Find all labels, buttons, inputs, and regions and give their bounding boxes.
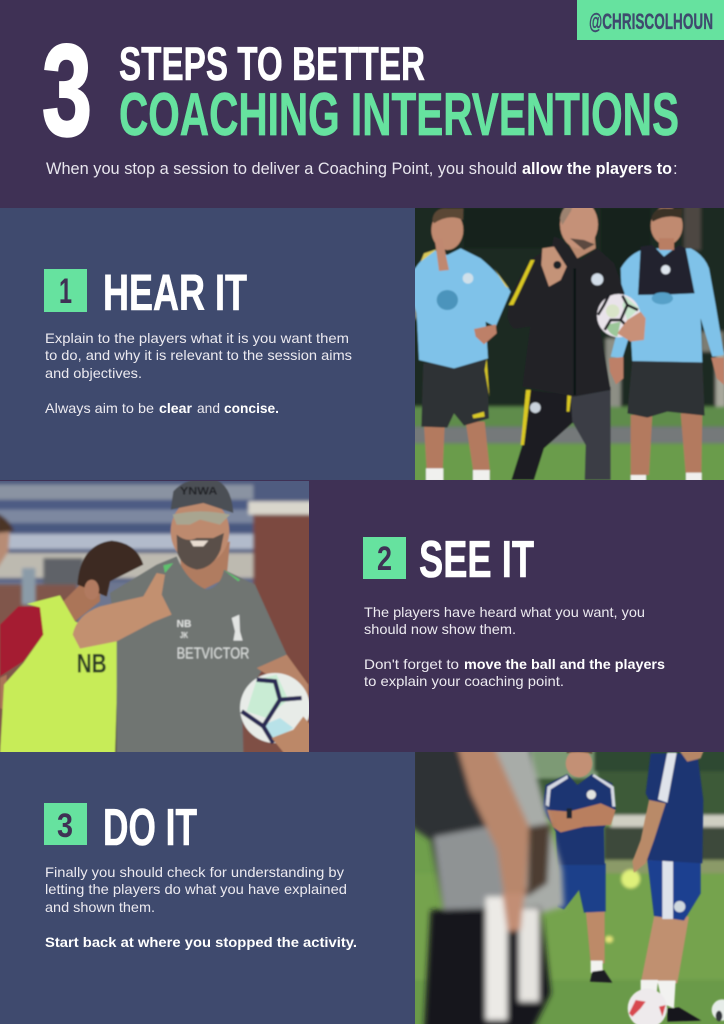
photo: coach in grey shirt with player in yellow bib <box>0 471 317 761</box>
body text step 1: clear <box>159 400 193 416</box>
photo: coach with folded arms on training pitch <box>407 743 724 1024</box>
panel: step 2 see it <box>309 480 724 752</box>
footballs <box>628 989 724 1024</box>
body text step 2 <box>364 604 665 689</box>
right assistant coach <box>632 750 704 1022</box>
body text step 3: letting the players do what you have explained <box>45 881 347 897</box>
coach in grey shirt: BETVICTOR <box>177 646 249 663</box>
body text step 1 <box>45 330 352 416</box>
body text step 2: to explain your coaching point. <box>364 673 564 689</box>
photo: coach with ball and two players in sky blue <box>407 198 724 487</box>
number badge 1: 1 <box>59 272 72 311</box>
left player <box>414 208 511 481</box>
number badge 3 <box>44 803 87 845</box>
body text step 1: Always aim to be <box>45 400 154 416</box>
ball <box>240 673 310 743</box>
centre coach <box>507 200 646 480</box>
number badge 3: 3 <box>57 807 73 845</box>
body text step 2: should now show them. <box>364 621 516 637</box>
heading: do it: DO IT <box>103 799 197 857</box>
body text step 1: to do, and why it is relevant to the session aims <box>45 347 352 363</box>
coach in grey shirt <box>73 478 308 755</box>
heading: see it: SEE IT <box>419 531 534 589</box>
handle tag <box>577 0 724 40</box>
body text step 1: Explain to the players what it is you want them <box>45 330 349 346</box>
panel: step 3 do it <box>0 752 415 1024</box>
ball <box>597 294 640 337</box>
intro sentence: allow the players to <box>522 160 672 178</box>
body text step 3: Finally you should check for understanding by <box>45 864 344 880</box>
heading: hear it: HEAR IT <box>103 264 247 321</box>
header panel <box>0 0 724 208</box>
body text step 1: concise. <box>224 400 279 416</box>
coach in grey shirt: NB <box>177 619 191 630</box>
body text step 3: and shown them. <box>45 899 155 915</box>
right player <box>609 206 724 481</box>
title line one: STEPS TO BETTER <box>119 37 425 90</box>
player in yellow bib <box>0 541 143 755</box>
body text step 1: and objectives. <box>45 365 142 381</box>
body text step 2: move the ball and the players <box>464 656 665 672</box>
body text step 3: Start back at where you stopped the activity. <box>45 934 357 950</box>
number badge 2: 2 <box>377 540 392 578</box>
intro sentence: When you stop a session to deliver a Coaching Point, you should <box>46 160 517 178</box>
blurred foreground player <box>411 747 564 1024</box>
body text step 2: The players have heard what you want, you <box>364 604 645 620</box>
body text step 2: Don't forget to <box>364 656 459 672</box>
intro sentence: : <box>673 160 678 178</box>
large numeral 3: 3 <box>42 17 92 163</box>
background <box>527 752 724 946</box>
body text step 1: and <box>197 400 220 416</box>
number badge 1 <box>44 269 87 312</box>
number badge 2 <box>363 537 406 579</box>
body text step 3 <box>45 864 357 950</box>
player in yellow bib: NB <box>77 649 107 679</box>
coach in grey shirt: JK <box>180 630 189 640</box>
background <box>407 198 724 487</box>
coach in grey shirt: YNWA <box>180 486 218 498</box>
background <box>0 471 317 761</box>
panel: step 1 hear it <box>0 208 415 480</box>
centre coach <box>542 748 616 983</box>
